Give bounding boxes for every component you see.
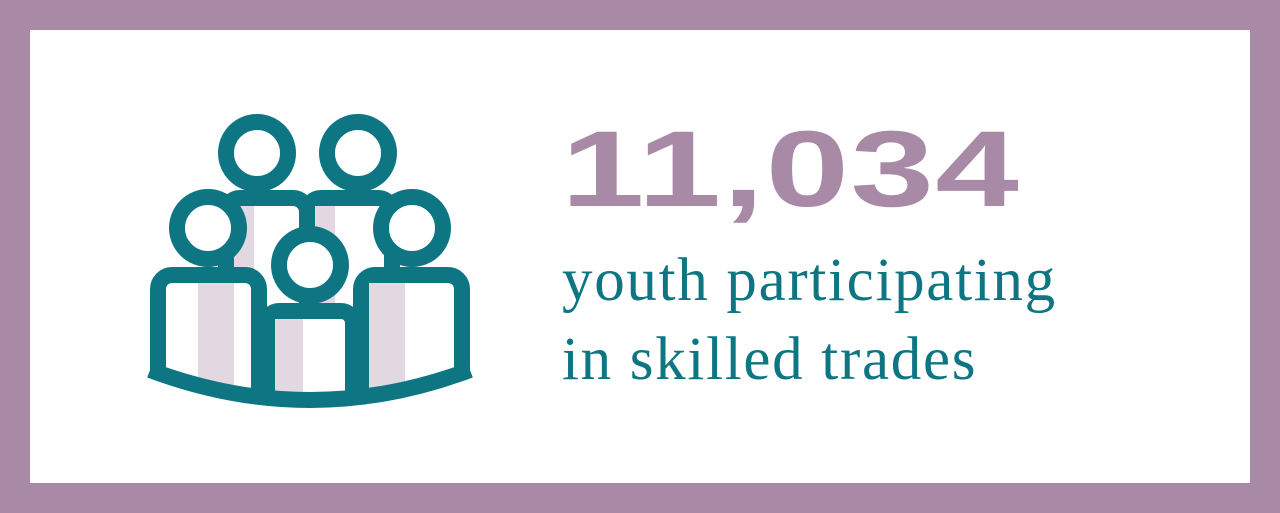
bottom arc bbox=[150, 370, 470, 400]
caption: in skilled trades bbox=[562, 326, 977, 393]
big number: 11,034 bbox=[561, 108, 1020, 229]
side heads bbox=[177, 197, 443, 259]
icon: group of people bbox=[147, 114, 473, 408]
center head bbox=[279, 234, 341, 296]
caption bbox=[562, 247, 1057, 393]
caption: youth participating bbox=[562, 247, 1057, 314]
back bodies bbox=[218, 190, 400, 303]
side bodies bbox=[158, 275, 462, 415]
back heads bbox=[226, 122, 389, 184]
center body bbox=[267, 303, 353, 392]
